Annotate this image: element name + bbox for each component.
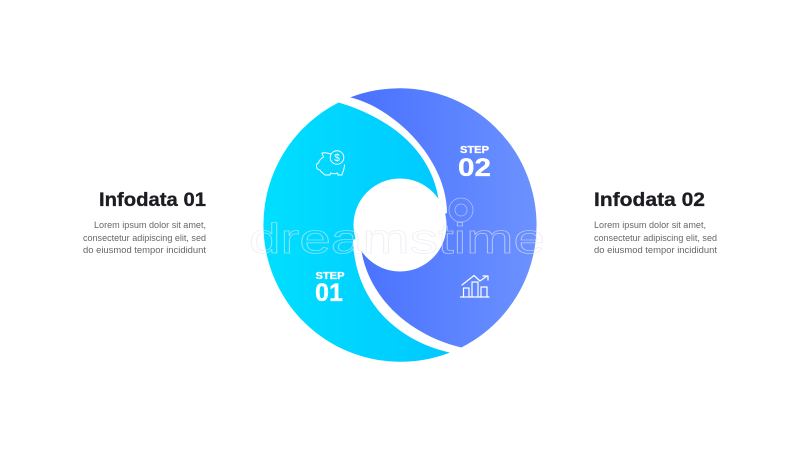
- heading: Infodata 02: Infodata 02: [594, 190, 705, 211]
- heading: Infodata 01: Infodata 01: [99, 190, 206, 211]
- text block: Infodata 01 description: [83, 220, 207, 255]
- panel: step 02 blue segment: [350, 88, 537, 348]
- watermark: [249, 198, 545, 262]
- step 01 label: STEP: [316, 270, 344, 282]
- text block: Infodata 02 description: Lorem ipsum dolor sit amet,: [594, 220, 706, 230]
- icon: piggy bank with dollar coin: $: [334, 153, 340, 164]
- centre hole: [354, 178, 446, 272]
- text block: Infodata 01 description: Lorem ipsum dolor sit amet,: [94, 220, 206, 230]
- step 01 label: 01: [315, 279, 343, 307]
- step 02 label: [458, 144, 491, 182]
- text block: Infodata 02 description: [594, 220, 718, 255]
- panel: step 01 cyan segment: [263, 102, 450, 362]
- text block: Infodata 01 description: do eiusmod tempor incididunt: [83, 245, 207, 255]
- watermark: dreamstime: [249, 215, 545, 262]
- icon: piggy bank with dollar coin: [316, 151, 344, 175]
- text block: Infodata 02 description: consectetur adipiscing elit, sed: [594, 233, 717, 243]
- step 02 label: STEP: [460, 144, 489, 156]
- text block: Infodata 01 description: consectetur adipiscing elit, sed: [83, 233, 206, 243]
- text block: Infodata 02 description: do eiusmod tempor incididunt: [594, 245, 718, 255]
- icon: bar chart with rising arrow: [460, 276, 489, 297]
- step 02 label: 02: [458, 154, 491, 182]
